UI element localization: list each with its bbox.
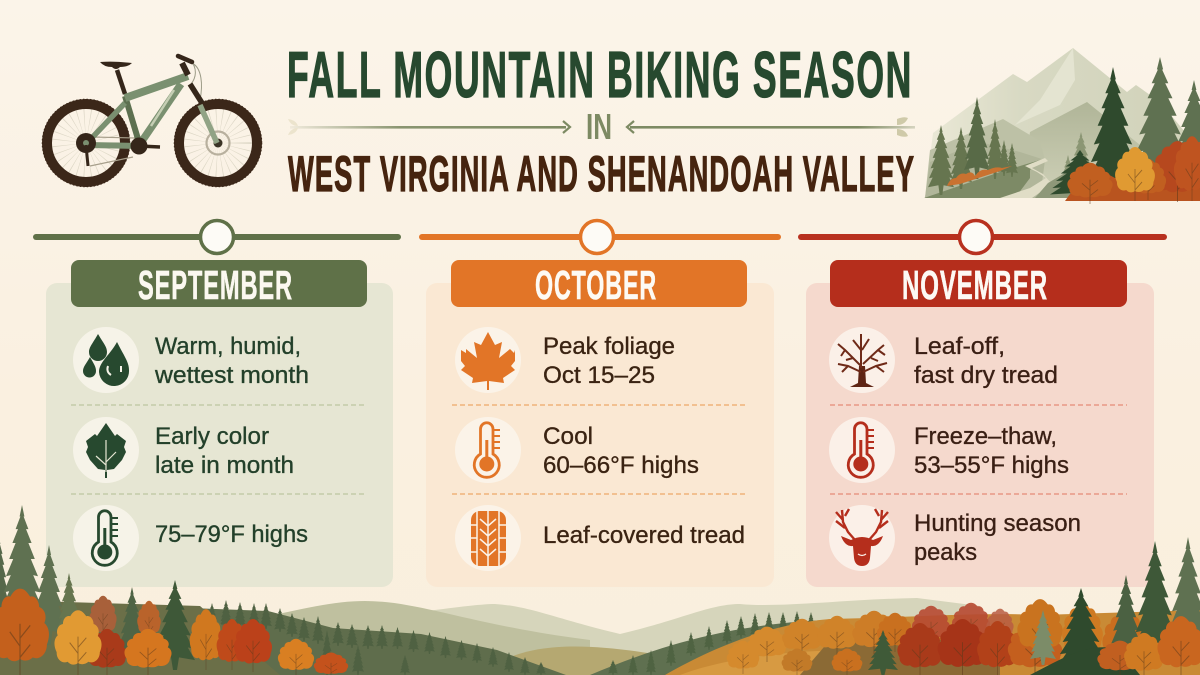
header: November	[830, 260, 1127, 308]
left conifers and crowns	[0, 505, 348, 675]
timeline: November	[798, 220, 1167, 254]
mountain scene	[924, 48, 1200, 204]
header: September: SEPTEMBER	[138, 262, 293, 308]
text: leaf-off: fast dry tread	[914, 362, 1058, 389]
text: leaf-off: Leaf-off,	[914, 333, 1005, 360]
drivetrain	[76, 133, 96, 153]
distant hills	[240, 598, 980, 675]
text: hunting season: Hunting season	[914, 510, 1081, 537]
icon: bare tree	[829, 327, 895, 393]
text: early color: Early color	[155, 423, 269, 450]
text: hunting season	[914, 510, 1081, 566]
icon: maple leaf	[455, 327, 521, 393]
left ridge	[190, 600, 566, 675]
icon: mountain bike	[42, 56, 262, 187]
icon: deer head	[829, 505, 895, 571]
text: freeze-thaw	[914, 423, 1069, 479]
small orange shrubs	[947, 166, 1012, 186]
panel: October	[426, 260, 774, 587]
autumn trees	[1065, 170, 1200, 201]
right conifers and crowns	[868, 537, 1200, 675]
icon: thermometer	[455, 417, 521, 483]
text: freeze-thaw: 53–55°F highs	[914, 452, 1069, 479]
icon: water drops	[73, 327, 139, 393]
text: tread: Leaf-covered tread	[543, 522, 745, 549]
text: freeze-thaw: Freeze–thaw,	[914, 423, 1057, 450]
header: September	[71, 260, 367, 308]
orange hillside	[665, 599, 1200, 675]
text: early color	[155, 423, 294, 479]
text: highs: 75–79°F highs	[155, 521, 308, 548]
text: cool: Cool	[543, 423, 593, 450]
header: November: NOVEMBER	[902, 262, 1048, 308]
header: October	[451, 260, 747, 308]
text: cool: 60–66°F highs	[543, 452, 699, 479]
text: leaf-off	[914, 333, 1058, 389]
icon: thermometer	[829, 417, 895, 483]
icon: leaf	[73, 417, 139, 483]
text: cool	[543, 423, 699, 479]
left conifers	[928, 97, 1018, 195]
title	[287, 38, 915, 202]
front wheel	[174, 99, 262, 187]
title connector: IN	[586, 106, 612, 147]
timeline: September	[33, 220, 401, 254]
timeline: October	[419, 220, 781, 254]
rear wheel	[42, 99, 130, 187]
far trees	[1060, 132, 1092, 193]
panel: November	[806, 260, 1154, 587]
text: wettest month: Warm, humid,	[155, 333, 301, 360]
text: wettest month	[154, 333, 309, 389]
main conifers	[1050, 150, 1110, 200]
text: peak foliage: Peak foliage	[543, 333, 675, 360]
text: wettest month: wettest month	[154, 362, 309, 389]
forest landscape: bottom band	[0, 505, 1200, 675]
text: peak foliage: Oct 15–25	[543, 362, 655, 389]
text: peak foliage	[543, 333, 675, 389]
panel: September	[46, 260, 393, 587]
seat post and saddle	[117, 70, 125, 94]
icon: thermometer	[73, 505, 139, 571]
trail and meadow	[924, 160, 1040, 198]
text: early color: late in month	[155, 452, 294, 479]
header: October: OCTOBER	[535, 262, 657, 308]
icon: tire tread	[455, 505, 521, 571]
frame	[125, 96, 138, 139]
text: hunting season: peaks	[914, 539, 977, 566]
title connector	[288, 106, 915, 147]
right ridge	[590, 611, 850, 675]
